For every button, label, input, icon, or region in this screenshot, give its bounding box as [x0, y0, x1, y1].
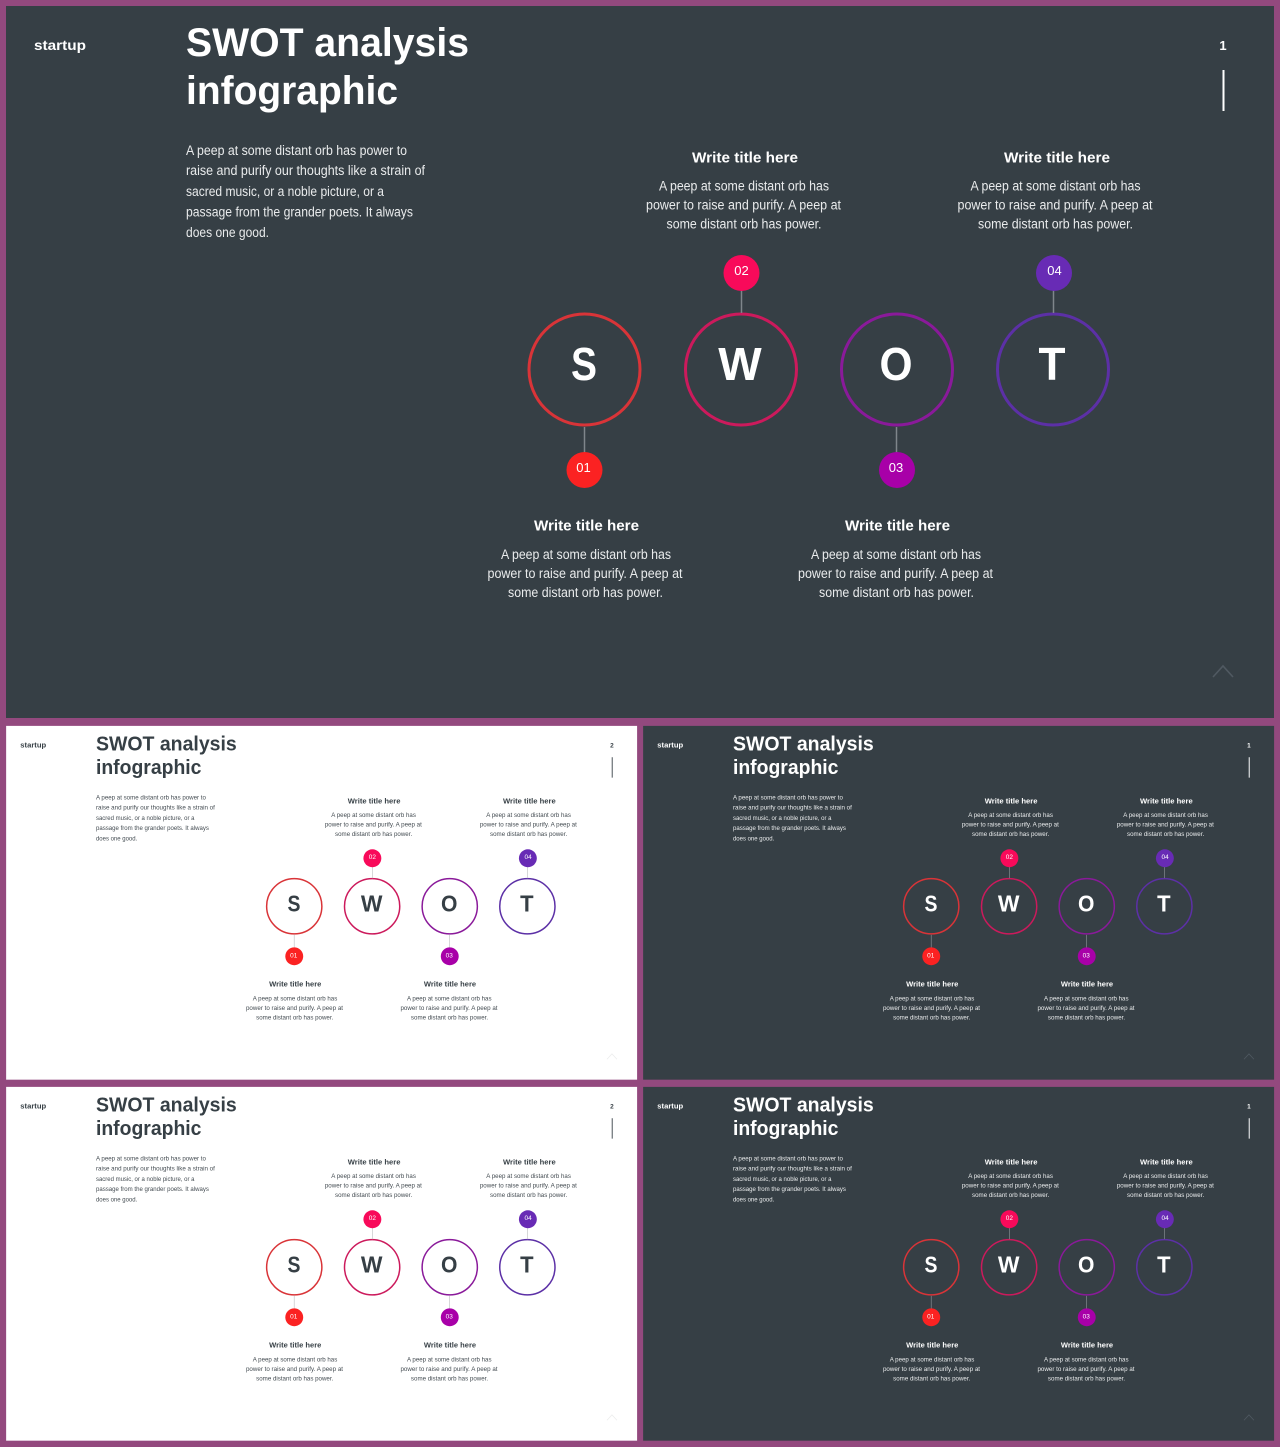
intro text block: sacred music, or a noble picture, or a: [96, 1176, 195, 1183]
T item: A peep at some distant orb has: [1123, 1173, 1208, 1180]
W item: power to raise and purify. A peep at: [325, 1183, 422, 1190]
S item: A peep at some distant orb has: [253, 996, 338, 1003]
O item: A peep at some distant orb has: [407, 996, 492, 1003]
W item: [962, 1157, 1059, 1295]
T item: [1117, 1157, 1214, 1295]
W item: some distant orb has power.: [666, 216, 822, 232]
S item: Write title here: [906, 979, 958, 988]
S item: 01: [927, 952, 935, 959]
page marker bar: [1248, 757, 1250, 778]
S item: A peep at some distant orb has: [501, 547, 671, 562]
T item: some distant orb has power.: [490, 831, 567, 838]
T item: T: [1038, 338, 1066, 390]
title: [96, 733, 237, 779]
T item: 04: [1047, 263, 1062, 278]
S item: power to raise and purify. A peep at: [246, 1005, 343, 1012]
S item: power to raise and purify. A peep at: [883, 1366, 980, 1373]
T item: some distant orb has power.: [978, 216, 1133, 232]
panel: small dark slide bottom: [643, 1087, 1274, 1441]
O item: Write title here: [845, 518, 950, 534]
O item: some distant orb has power.: [411, 1375, 488, 1382]
title: infographic: [733, 757, 838, 779]
title: [96, 1094, 237, 1140]
O item: O: [1078, 890, 1094, 916]
S item: some distant orb has power.: [893, 1014, 970, 1021]
S item: Write title here: [906, 1340, 958, 1349]
logo: startup: [34, 37, 86, 53]
W item: W: [361, 1251, 383, 1277]
W item: some distant orb has power.: [335, 831, 412, 838]
intro text block: [186, 143, 425, 240]
O item: Write title here: [1061, 979, 1113, 988]
intro text block: [96, 1156, 215, 1203]
intro text block: A peep at some distant orb has power to: [186, 143, 407, 158]
O item: some distant orb has power.: [1048, 1014, 1125, 1021]
S item: power to raise and purify. A peep at: [488, 566, 683, 581]
icon: up chevron: [1244, 1054, 1254, 1059]
panel: small light slide bottom: [6, 1087, 637, 1441]
T item: [480, 796, 577, 934]
W item: 02: [369, 1215, 376, 1222]
W item: A peep at some distant orb has: [331, 1173, 416, 1180]
W item: Write title here: [985, 1157, 1037, 1166]
S item: Write title here: [269, 1340, 321, 1349]
O item: 03: [446, 1313, 453, 1320]
panel: small light slide top: [6, 726, 637, 1080]
T item: [480, 1157, 577, 1295]
logo: startup: [657, 742, 683, 749]
page number: 1: [1219, 38, 1227, 53]
O item: A peep at some distant orb has: [1044, 1357, 1129, 1364]
title: SWOT analysis: [96, 1094, 237, 1116]
title: [733, 733, 874, 779]
intro text block: raise and purify our thoughts like a strain of: [733, 804, 852, 811]
intro text block: A peep at some distant orb has power to: [96, 1156, 206, 1163]
W item: 02: [1006, 854, 1013, 861]
T item: power to raise and purify. A peep at: [480, 1183, 577, 1190]
logo: startup: [20, 742, 46, 749]
O item: A peep at some distant orb has: [1044, 996, 1129, 1003]
W item: power to raise and purify. A peep at: [325, 822, 422, 829]
panel: small dark slide top: [643, 726, 1274, 1080]
T item: T: [520, 890, 534, 916]
T item: Write title here: [1004, 150, 1110, 166]
O item: some distant orb has power.: [411, 1014, 488, 1021]
intro text block: does one good.: [733, 1196, 774, 1203]
S item: 01: [927, 1313, 935, 1320]
O item: [400, 1240, 498, 1382]
W item: power to raise and purify. A peep at: [646, 198, 841, 212]
page marker bar: [1248, 1118, 1250, 1139]
T item: power to raise and purify. A peep at: [480, 822, 577, 829]
intro text block: sacred music, or a noble picture, or a: [96, 815, 195, 822]
T item: Write title here: [1140, 1157, 1193, 1166]
intro text block: raise and purify our thoughts like a strain of: [96, 804, 215, 811]
intro text block: does one good.: [96, 1196, 137, 1203]
T item: T: [1157, 1251, 1171, 1277]
intro text block: raise and purify our thoughts like a strain of: [733, 1165, 852, 1172]
title: infographic: [733, 1118, 838, 1140]
T item: Write title here: [503, 1157, 556, 1166]
S item: S: [288, 1251, 300, 1277]
O item: power to raise and purify. A peep at: [400, 1005, 498, 1012]
O item: Write title here: [424, 1340, 476, 1349]
T item: power to raise and purify. A peep at: [1117, 1183, 1214, 1190]
O item: power to raise and purify. A peep at: [1037, 1366, 1135, 1373]
intro text block: passage from the grander poets. It always: [733, 1186, 846, 1193]
intro text block: [96, 795, 215, 842]
title: SWOT analysis: [733, 1094, 874, 1116]
page number: 2: [610, 1103, 614, 1110]
intro text block: A peep at some distant orb has power to: [96, 795, 206, 802]
T item: Write title here: [1140, 796, 1193, 805]
O item: [798, 314, 993, 600]
S item: 01: [576, 460, 591, 475]
page marker bar: [1222, 70, 1224, 111]
O item: power to raise and purify. A peep at: [400, 1366, 498, 1373]
T item: A peep at some distant orb has: [970, 178, 1141, 194]
logo: startup: [657, 1103, 683, 1110]
intro text block: sacred music, or a noble picture, or a: [733, 1176, 832, 1183]
S item: S: [288, 890, 300, 916]
W item: 02: [369, 854, 376, 861]
W item: W: [998, 1251, 1020, 1277]
S item: [488, 314, 683, 600]
logo: startup: [20, 1103, 46, 1110]
S item: Write title here: [269, 979, 321, 988]
O item: Write title here: [1061, 1340, 1113, 1349]
W item: W: [998, 890, 1020, 916]
title: infographic: [96, 757, 201, 779]
page marker bar: [611, 757, 613, 778]
title: infographic: [96, 1118, 201, 1140]
O item: [1037, 1240, 1135, 1382]
intro text block: [733, 1156, 852, 1203]
intro text block: A peep at some distant orb has power to: [733, 1156, 843, 1163]
intro text block: raise and purify our thoughts like a strain of: [96, 1165, 215, 1172]
T item: 04: [525, 854, 532, 861]
O item: O: [441, 1251, 457, 1277]
W item: A peep at some distant orb has: [331, 812, 416, 819]
S item: power to raise and purify. A peep at: [246, 1366, 343, 1373]
O item: 03: [1083, 1313, 1090, 1320]
intro text block: passage from the grander poets. It always: [186, 204, 413, 220]
intro text block: passage from the grander poets. It always: [96, 825, 209, 832]
intro text block: A peep at some distant orb has power to: [733, 795, 843, 802]
S item: A peep at some distant orb has: [253, 1357, 338, 1364]
title: [733, 1094, 874, 1140]
T item: A peep at some distant orb has: [486, 812, 571, 819]
S item: some distant orb has power.: [893, 1375, 970, 1382]
T item: some distant orb has power.: [1127, 1192, 1204, 1199]
W item: [325, 796, 422, 934]
O item: 03: [446, 952, 453, 959]
T item: some distant orb has power.: [490, 1192, 567, 1199]
W item: power to raise and purify. A peep at: [962, 822, 1059, 829]
S item: S: [925, 890, 937, 916]
O item: A peep at some distant orb has: [407, 1357, 492, 1364]
T item: A peep at some distant orb has: [1123, 812, 1208, 819]
T item: [958, 150, 1153, 425]
O item: A peep at some distant orb has: [811, 547, 981, 562]
W item: some distant orb has power.: [972, 1192, 1049, 1199]
O item: [400, 879, 498, 1021]
page number: 2: [610, 742, 614, 749]
S item: some distant orb has power.: [508, 585, 663, 600]
S item: power to raise and purify. A peep at: [883, 1005, 980, 1012]
W item: 02: [734, 263, 749, 278]
O item: power to raise and purify. A peep at: [1037, 1005, 1135, 1012]
W item: Write title here: [348, 1157, 400, 1166]
W item: Write title here: [692, 150, 798, 166]
T item: power to raise and purify. A peep at: [958, 198, 1153, 212]
O item: Write title here: [424, 979, 476, 988]
S item: A peep at some distant orb has: [890, 1357, 975, 1364]
O item: O: [880, 338, 912, 390]
O item: O: [1078, 1251, 1094, 1277]
W item: 02: [1006, 1215, 1013, 1222]
S item: [883, 879, 980, 1021]
intro text block: sacred music, or a noble picture, or a: [186, 184, 384, 199]
intro text block: sacred music, or a noble picture, or a: [733, 815, 832, 822]
O item: power to raise and purify. A peep at: [798, 566, 993, 581]
icon: up chevron: [1213, 666, 1233, 677]
intro text block: [733, 795, 852, 842]
W item: some distant orb has power.: [972, 831, 1049, 838]
intro text block: passage from the grander poets. It always: [96, 1186, 209, 1193]
T item: T: [520, 1251, 534, 1277]
intro text block: does one good.: [186, 225, 269, 240]
W item: A peep at some distant orb has: [968, 812, 1053, 819]
T item: 04: [1162, 854, 1169, 861]
intro text block: raise and purify our thoughts like a strain of: [186, 163, 425, 178]
T item: power to raise and purify. A peep at: [1117, 822, 1214, 829]
S item: some distant orb has power.: [256, 1375, 333, 1382]
intro text block: does one good.: [96, 835, 137, 842]
O item: [1037, 879, 1135, 1021]
O item: some distant orb has power.: [1048, 1375, 1125, 1382]
T item: some distant orb has power.: [1127, 831, 1204, 838]
page number: 1: [1247, 1103, 1251, 1110]
T item: T: [1157, 890, 1171, 916]
icon: up chevron: [1244, 1415, 1254, 1420]
S item: [883, 1240, 980, 1382]
T item: 04: [525, 1215, 532, 1222]
W item: [325, 1157, 422, 1295]
S item: S: [925, 1251, 937, 1277]
O item: O: [441, 890, 457, 916]
W item: [646, 150, 841, 425]
title: infographic: [186, 69, 398, 113]
T item: [1117, 796, 1214, 934]
intro text block: passage from the grander poets. It always: [733, 825, 846, 832]
T item: 04: [1162, 1215, 1169, 1222]
icon: up chevron: [607, 1054, 617, 1059]
title: SWOT analysis: [186, 21, 469, 65]
W item: [962, 796, 1059, 934]
O item: 03: [889, 460, 903, 475]
title: SWOT analysis: [96, 733, 237, 755]
title: SWOT analysis: [733, 733, 874, 755]
S item: Write title here: [534, 518, 639, 534]
S item: A peep at some distant orb has: [890, 996, 975, 1003]
intro text block: does one good.: [733, 835, 774, 842]
O item: some distant orb has power.: [819, 585, 974, 600]
W item: some distant orb has power.: [335, 1192, 412, 1199]
W item: W: [718, 338, 762, 390]
T item: Write title here: [503, 796, 556, 805]
S item: S: [571, 338, 597, 390]
W item: Write title here: [985, 796, 1037, 805]
S item: 01: [290, 1313, 298, 1320]
S item: 01: [290, 952, 298, 959]
title: [186, 21, 469, 113]
icon: up chevron: [607, 1415, 617, 1420]
O item: 03: [1083, 952, 1090, 959]
S item: some distant orb has power.: [256, 1014, 333, 1021]
page number: 1: [1247, 742, 1251, 749]
S item: [246, 1240, 343, 1382]
W item: W: [361, 890, 383, 916]
W item: A peep at some distant orb has: [659, 178, 829, 194]
T item: A peep at some distant orb has: [486, 1173, 571, 1180]
page marker bar: [611, 1118, 613, 1139]
W item: power to raise and purify. A peep at: [962, 1183, 1059, 1190]
S item: [246, 879, 343, 1021]
W item: Write title here: [348, 796, 400, 805]
W item: A peep at some distant orb has: [968, 1173, 1053, 1180]
panel: large dark slide: [6, 6, 1274, 718]
